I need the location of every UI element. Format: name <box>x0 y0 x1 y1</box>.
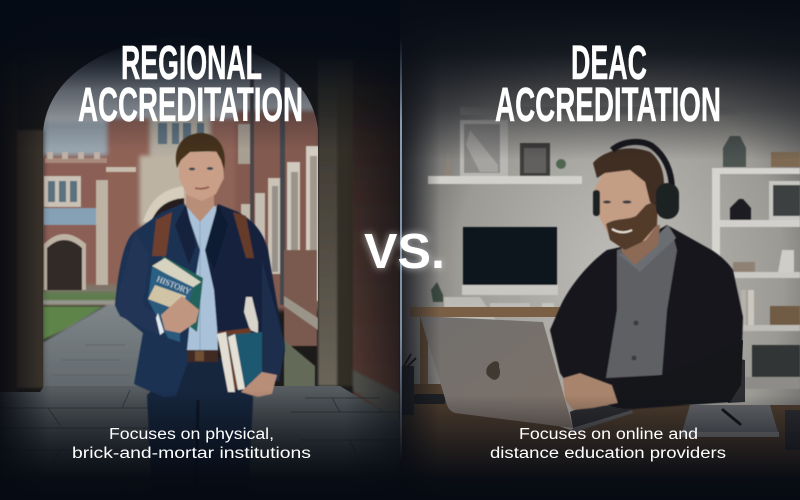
student figure <box>115 133 285 500</box>
main desk <box>402 384 800 476</box>
side shading <box>0 66 48 466</box>
student figure: HISTORY <box>155 274 193 296</box>
center divider line <box>400 38 402 462</box>
panel: regional accreditation photo <box>0 48 400 468</box>
book stack under left arm <box>158 256 204 332</box>
cardigan <box>550 225 743 410</box>
caption: regional: Focuses on physical, <box>109 426 274 443</box>
desk rear <box>410 307 560 317</box>
neck <box>186 190 214 222</box>
vs label: VS. <box>364 225 445 279</box>
headphones <box>612 142 672 190</box>
chair <box>728 358 745 403</box>
eyes <box>603 200 632 204</box>
backpack straps <box>152 212 172 256</box>
building details <box>44 65 319 388</box>
hair <box>593 148 664 208</box>
trousers <box>146 358 254 463</box>
right hand <box>241 372 277 397</box>
heading: regional accreditation: ACCREDITATION <box>78 79 303 132</box>
typing hand <box>563 373 618 410</box>
beard <box>606 200 658 250</box>
right sleeve <box>262 260 285 382</box>
caption: deac: distance education providers <box>490 445 726 462</box>
face <box>593 169 659 242</box>
shirt <box>606 232 677 378</box>
wall shading <box>400 0 440 500</box>
caption: regional <box>72 426 311 462</box>
paved path <box>43 304 144 388</box>
shirt <box>184 206 218 352</box>
top shade over right photo <box>400 0 800 160</box>
bottom shade over right photo <box>400 395 800 500</box>
heading: regional accreditation <box>78 37 303 132</box>
panel: deac accreditation photo <box>400 27 800 474</box>
eyes and mouth <box>189 167 213 170</box>
face <box>179 152 224 201</box>
caption: regional: brick-and-mortar institutions <box>72 445 311 462</box>
hair <box>176 133 225 170</box>
heading: deac accreditation <box>495 37 721 132</box>
phone <box>414 394 445 404</box>
imac <box>431 227 558 320</box>
caption: deac <box>490 426 726 462</box>
vs label: VS. <box>364 225 445 279</box>
apple logo shape <box>486 361 500 380</box>
notebook <box>682 405 779 437</box>
home office shelves and decor <box>428 107 800 390</box>
belt <box>186 350 218 362</box>
lawn <box>43 292 115 302</box>
stone archway walls <box>0 60 400 425</box>
heading: deac accreditation: DEAC <box>571 37 647 90</box>
blazer <box>115 203 200 397</box>
left arm <box>118 312 162 322</box>
paved floor <box>0 344 400 465</box>
bottom shade over left photo <box>0 390 400 500</box>
courtyard seen through arch <box>43 50 318 388</box>
neck <box>618 225 660 265</box>
book stack under right arm <box>216 328 252 390</box>
pen cup <box>401 366 414 415</box>
man at laptop <box>550 142 743 410</box>
sleeve <box>618 340 743 407</box>
top shade over left photo <box>0 0 400 150</box>
laptop <box>420 316 633 432</box>
caption: deac: Focuses on online and <box>519 426 698 443</box>
left hand <box>161 296 199 333</box>
heading: regional accreditation: REGIONAL <box>121 37 262 90</box>
